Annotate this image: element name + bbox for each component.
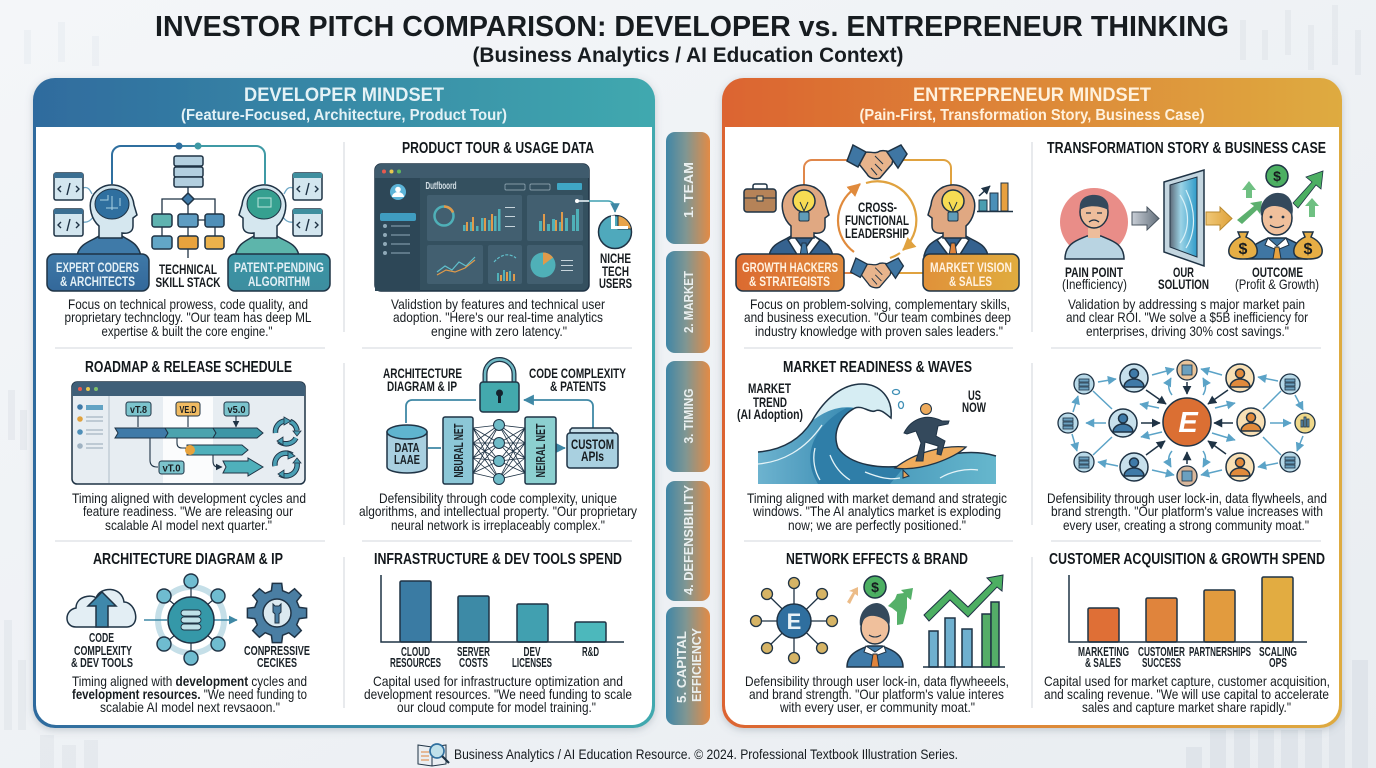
label: code complexity: & PATENTS [550,378,606,394]
text: architecture description: Timing aligned with development cycles and [72,673,307,689]
label: technical skill stack: TECHNICAL [159,261,217,277]
label: architecture diagram: DIAGRAM & IP [387,378,457,394]
bar chart: DEV [524,645,541,659]
arrow: solution to outcome [1206,207,1232,230]
icon: custom apis: APIs [581,448,604,464]
dashboard screenshot [375,164,589,291]
text: defensibility description: algorithms, and intellectual property. "Our proprietary [359,503,637,519]
icon: data lake [387,425,427,473]
label: technical skill stack: SKILL STACK [156,274,220,290]
label: growth hackers [736,254,844,291]
text: defensibility description: Defensibility through user lock-in, data flywheels, and [1047,490,1327,506]
bar chart: SCALING [1259,645,1297,659]
label: us now: US [968,387,981,403]
icon: skill stack tree [152,156,224,258]
icon: data lake: DATA [394,441,420,455]
cell: developer roadmap [72,359,306,533]
neural net boxes: NBURAL NET [452,423,466,478]
tab: capital efficiency: EFFICIENCY [689,628,704,702]
icon: code windows left [54,173,94,236]
label: pain point: (Inefficiency) [1062,276,1127,292]
roadmap window: VE.D [180,405,196,416]
heading: ARCHITECTURE DIAGRAM & IP [93,551,283,568]
bar chart: R&D [582,645,599,659]
label: code complexity and dev tools: COMPLEXITY [74,644,132,658]
label: market vision [923,254,1019,291]
label: architecture diagram: ARCHITECTURE [383,365,462,381]
label: compressive cecikes: CONPRESSIVE [244,644,310,658]
roadmap window: v5.0 [228,405,246,416]
bar chart: & SALES [1085,656,1121,670]
cell: developer architecture diagram [67,551,310,715]
label: compressive cecikes: CECIKES [257,656,297,670]
roadmap window [72,382,305,484]
text: timing description: scalable AI model next quarter." [105,517,272,533]
text: defensibility description [359,490,637,533]
text: market description [391,296,605,339]
bar chart: RESOURCES [390,656,441,670]
icon: growth bars [977,183,1013,212]
data nodes [1058,360,1315,486]
text: capital description: our cloud compute for model training." [397,699,596,715]
cell: entrepreneur network effects [745,551,1009,715]
text: architecture description: scalabie AI model next revsaoon." [100,699,280,715]
label: code complexity [529,365,626,394]
label: niche tech users [599,250,632,291]
text: timing description: windows. "The AI analytics market is exploding [752,503,1001,519]
tab: timing [666,361,710,472]
text: market description: Validstion by features and technical user [391,296,605,312]
heading: INFRASTRUCTURE & DEV TOOLS SPEND [374,551,622,568]
text: capital description: Capital used for market capture, customer acquisition, [1044,673,1330,689]
network edges [1072,369,1303,475]
label: technical skill stack [156,261,220,290]
title: (Business Analytics / AI Education Context) [472,44,904,67]
icon: book with magnifier [418,744,449,766]
icon: outcome person with money: $ [1304,241,1313,258]
label: niche tech users: NICHE [600,250,631,266]
text: architecture description [72,673,307,715]
text: market description: Validation by addressing s major market pain [1068,296,1305,312]
cell: entrepreneur market readiness [737,359,1007,533]
icon: handshake bottom [851,258,903,288]
label: us now: NOW [962,399,987,415]
icon: leader head right with bulb [924,185,988,256]
icon: pain point person [1060,188,1128,259]
cell: developer product tour [375,140,632,339]
text: market description: and clear ROI. "We solve a $5B inefficiency for [1066,309,1308,325]
user nodes left [1109,364,1148,481]
text: capital description: and scaling revenue. "We will use capital to accelerate [1044,686,1329,702]
center tabs: comparison dimensions [666,132,710,725]
text: team description: industry knowledge with proven sales leaders." [755,323,1003,339]
bar chart [1069,575,1307,670]
text: architecture description: fevelopment resources. "We need funding to [72,686,307,702]
bar chart: CLOUD [401,645,430,659]
icon: brand person with money: $ [871,579,879,595]
label: expert coders: EXPERT CODERS [56,260,139,275]
icon: outcome person with money: $ [1239,241,1248,258]
label: our solution: SOLUTION [1158,276,1209,292]
bar chart [381,575,624,670]
text: market description: engine with zero latency." [431,323,567,339]
label: niche tech users: USERS [599,275,632,291]
icon: brand person with money [847,576,913,667]
text: timing description: Timing aligned with market demand and strategic [747,490,1007,506]
text: network effects description: and brand strength. "Our platform's value interes [749,686,1004,702]
label: patent-pending algorithm: PATENT-PENDING [234,260,324,275]
bar chart: PARTNERSHIPS [1189,645,1251,659]
label: cross-functional leadership: CROSS- [858,199,897,215]
label: pain point [1062,264,1127,292]
panel: developer mindset [33,78,655,728]
entrepreneur header: ENTREPRENEUR MINDSET [913,85,1151,106]
label: cross-functional leadership [845,199,909,241]
label: patent-pending algorithm: ALGORITHM [248,274,310,289]
icon: developer head left [77,185,141,256]
icon: gear and wrench [247,583,307,643]
text: timing description [72,490,306,533]
dashboard screenshot: Dutfboord [426,181,456,192]
label: patent-pending algorithm [228,254,330,291]
label: pain point: PAIN POINT [1065,264,1123,280]
connectors to lock [406,400,593,428]
label: code complexity: CODE COMPLEXITY [529,365,626,381]
icon: brand network: E [787,609,801,634]
tab: timing: 3. TIMING [681,388,696,444]
label: market vision: MARKET VISION [930,260,1012,275]
tab: market: 2. MARKET [681,271,696,333]
cell: developer architecture network [359,360,637,533]
tab: team [666,132,710,244]
text: team description [64,296,312,339]
cell: developer team [47,142,330,339]
text: network effects description [745,673,1009,715]
text: timing description: Timing aligned with development cycles and [72,490,306,506]
heading: ROADMAP & RELEASE SCHEDULE [85,359,292,376]
developer header: DEVELOPER MINDSET [244,85,444,106]
bar chart: OPS [1269,656,1287,670]
connector between heads [112,142,265,184]
icon: solution portal [1164,170,1204,266]
label: growth hackers: GROWTH HACKERS [742,260,838,275]
footer [418,744,958,766]
cell: entrepreneur transformation story [1047,140,1326,339]
label: niche tech users: TECH [602,263,629,279]
text: defensibility description: every user, creating a strong community moat." [1063,517,1309,533]
entrepreneur header [860,85,1204,124]
text: team description: proprietary technclogy. "Our team has deep ML [64,309,312,325]
label: compressive cecikes [244,644,310,670]
text: market description: adoption. "Here's our real-time analytics [393,309,603,325]
bar chart: SERVER [457,645,490,659]
label: outcome: OUTCOME [1252,264,1303,280]
label: growth hackers: & STRATEGISTS [749,274,830,289]
label: code complexity and dev tools: CODE [89,631,114,645]
user nodes right [1226,364,1265,481]
label: market trend [737,380,803,422]
text: team description: and business execution. "Our team combines deep [744,309,1011,325]
neural net boxes [443,417,556,484]
bar chart: CUSTOMER [1138,645,1185,659]
tab: capital efficiency [666,607,710,725]
icon: niche pie [598,216,632,248]
label: our solution: OUR [1173,264,1194,280]
label: our solution [1158,264,1209,292]
entrepreneur header: (Pain-First, Transformation Story, Business Case) [860,107,1204,124]
connector ring [804,160,951,273]
roadmap window: vT.0 [162,464,181,474]
tab: defensibility: 4. DEFENSIBILITY [681,485,696,595]
text: timing description [747,490,1007,533]
icon: wave [758,384,996,484]
icon: brand network [750,578,838,664]
cell: entrepreneur team [736,145,1019,339]
leadership cycle arrows [838,181,916,258]
icon: outcome person with money [1229,165,1323,259]
label: cross-functional leadership: FUNCTIONAL [845,212,909,228]
icon: custom apis: CUSTOM [571,436,614,452]
label: cross-functional leadership: LEADERSHIP [845,225,909,241]
text: team description: expertise & built the core engine." [102,323,273,339]
heading: MARKET READINESS & WAVES [783,359,972,376]
label: outcome [1235,264,1319,292]
icon: data lake: LAAE [394,453,420,467]
tab: team: 1. TEAM [681,162,696,218]
text: timing description: feature readiness. "We are releasing our [83,503,293,519]
text: team description [744,296,1011,339]
tab: defensibility [666,481,710,601]
cell: entrepreneur user network [1047,360,1327,533]
text: market description: enterprises, driving 30% cost savings." [1086,323,1289,339]
text: market description [1066,296,1308,339]
bar chart: MARKETING [1078,645,1129,659]
developer header [181,85,507,124]
text: capital description [1044,673,1330,715]
icon: handshake top [847,145,907,179]
footer: Business Analytics / AI Education Resource. © 2024. Professional Textbook Illustration Series. [454,747,958,762]
label: us now [962,387,987,415]
arrows through network [428,447,565,449]
bar chart: COSTS [459,656,488,670]
heading: PRODUCT TOUR & USAGE DATA [402,140,594,157]
title: INVESTOR PITCH COMPARISON: DEVELOPER vs. ENTREPRENEUR THINKING [155,11,1229,43]
text: network effects description: with every user, er community moat." [779,699,975,715]
icon: database hub [144,574,237,665]
text: capital description: development resources. "We need funding to scale [364,686,632,702]
label: market trend: MARKET [748,380,791,396]
heading: NETWORK EFFECTS & BRAND [786,551,968,568]
text: capital description: sales and capture market share rapidly." [1082,699,1291,715]
tab: capital efficiency: 5. CAPITAL [674,631,689,703]
developer header: (Feature-Focused, Architecture, Product Tour) [181,107,507,124]
icon: outcome person with money: $ [1273,168,1281,184]
text: capital description: Capital used for infrastructure optimization and [373,673,623,689]
text: defensibility description: neural network is irreplaceably complex." [391,517,605,533]
label: market vision: & SALES [949,274,992,289]
label: market trend: (AI Adoption) [737,406,803,422]
icon: surfer on board [895,404,966,478]
chart: brand growth [923,575,1005,667]
cell: developer spend chart [364,551,632,715]
label: outcome: (Profit & Growth) [1235,276,1319,292]
label: code complexity and dev tools [71,631,133,670]
panel: entrepreneur mindset [722,78,1342,728]
roadmap window: vT.8 [130,405,147,416]
label: market trend: TREND [753,394,787,410]
icon: padlock [480,360,519,412]
cell: entrepreneur growth spend [1044,551,1330,715]
bar chart: LICENSES [512,656,552,670]
label: code complexity and dev tools: & DEV TOOLS [71,656,133,670]
tab: market [666,251,710,353]
arrow: pain to solution [1132,207,1159,230]
label: expert coders [47,254,149,291]
central platform hub: E [1178,407,1199,439]
icon: cloud upload [67,589,136,627]
icon: developer head right [235,185,299,256]
neural net boxes: NEIRAL NET [534,423,548,478]
text: network effects description: Defensibility through user lock-in, data flywheeels, [745,673,1009,689]
central platform hub [1163,398,1211,446]
icon: custom apis [567,428,618,468]
text: team description: Focus on technical prowess, code quality, and [68,296,308,312]
bar chart: SUCCESS [1142,656,1181,670]
text: defensibility description: Defensibility through code complexity, unique [379,490,617,506]
text: defensibility description [1047,490,1327,533]
connector to niche users [575,199,615,212]
text: timing description: now; we are perfectly positioned." [788,517,966,533]
label: architecture diagram [383,365,462,394]
icon: leader head left with bulb [769,185,833,256]
icon: code windows right [282,173,322,236]
text: defensibility description: brand strength. "Our platform's value increases with [1051,503,1323,519]
text: capital description [364,673,632,715]
title [155,11,1229,67]
label: expert coders: & ARCHITECTS [60,274,135,289]
text: team description: Focus on problem-solving, complementary skills, [750,296,1010,312]
icon: briefcase [744,184,776,212]
